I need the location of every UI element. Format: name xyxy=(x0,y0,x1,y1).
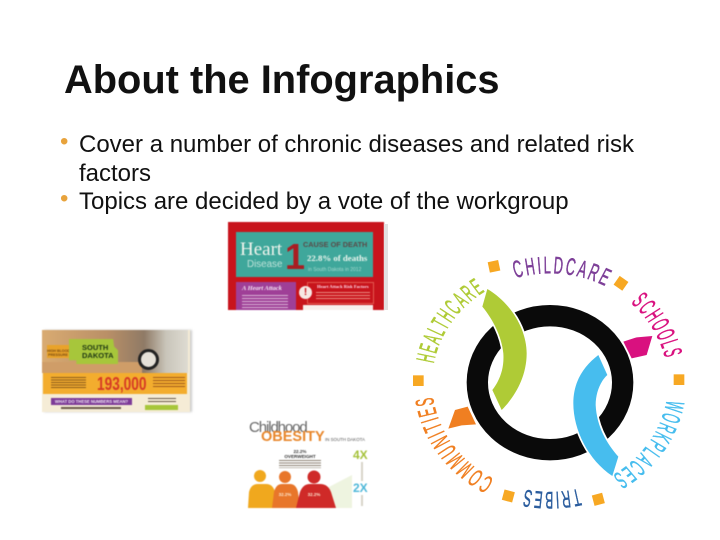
blue arc xyxy=(573,355,618,476)
black ring xyxy=(477,316,623,450)
bullet 1 text: Cover a number of chronic diseases and related risk xyxy=(79,131,634,158)
2X label: 2X xyxy=(353,481,368,495)
side text lines xyxy=(148,398,176,404)
statistic lines xyxy=(279,460,321,468)
heart thumbnail shadow xyxy=(384,224,388,310)
orange label: PRESSURE xyxy=(48,353,68,357)
tribes: TRIBES xyxy=(523,489,582,509)
healthcare: HEALTHCARE xyxy=(416,278,485,363)
schools: SCHOOLS xyxy=(632,292,682,357)
percent of deaths: 22.8% of deaths xyxy=(307,253,367,263)
figure labels: 32.2% xyxy=(279,492,291,497)
cause of death: CAUSE OF DEATH xyxy=(303,240,367,249)
193,000: 193,000 xyxy=(97,374,146,394)
logo: circular settings emblem xyxy=(413,256,685,509)
south dakota label xyxy=(82,343,114,360)
south dakota label: DAKOTA xyxy=(82,350,114,360)
blood pressure gauge xyxy=(138,349,159,370)
purple panel text lines xyxy=(242,295,288,309)
orange arrowhead xyxy=(448,407,476,429)
bullet 2 text: Topics are decided by a vote of the workgroup xyxy=(79,188,569,215)
warning badge: ! xyxy=(304,287,307,298)
ring labels xyxy=(415,256,685,509)
purple bar: WHAT DO THESE NUMBERS MEAN? xyxy=(55,399,128,404)
heading: Heart: Heart xyxy=(240,239,282,260)
orange label: HIGH BLOOD xyxy=(47,349,70,353)
thumbnail: South Dakota infographic xyxy=(42,330,190,412)
orange figure xyxy=(272,471,300,508)
in south dakota: IN SOUTH DAKOTA xyxy=(325,437,365,442)
bullet list xyxy=(60,128,634,215)
heading: Disease: Disease xyxy=(247,259,282,270)
pink arrowhead xyxy=(623,336,652,358)
yellow figure xyxy=(248,470,277,508)
orange label xyxy=(47,345,69,358)
obesity heading: OBESITY xyxy=(261,429,325,445)
white box xyxy=(303,305,373,311)
purple panel xyxy=(236,282,296,310)
risk text lines xyxy=(316,292,370,300)
risk factors panel xyxy=(307,282,374,304)
bullet 1 marker: • xyxy=(60,128,68,155)
scale pole xyxy=(361,460,363,506)
green arc xyxy=(482,289,527,410)
caption under purple bar xyxy=(61,407,121,409)
small caption: in South Dakota in 2012 xyxy=(308,267,361,273)
photo background xyxy=(42,330,188,373)
title: About the Infographics xyxy=(64,58,500,102)
statistic text xyxy=(284,449,316,459)
band text right xyxy=(153,377,185,389)
4X label: 4X xyxy=(353,448,368,462)
green button xyxy=(145,405,178,410)
orange squares xyxy=(413,260,684,506)
big number 1: 1 xyxy=(285,236,305,277)
green card xyxy=(69,339,118,364)
childcare: CHILDCARE xyxy=(513,256,612,286)
warning badge xyxy=(299,286,312,299)
green wedge xyxy=(327,475,352,508)
bullet 2 marker: • xyxy=(60,185,68,212)
thumbnail: heart disease infographic xyxy=(228,222,384,310)
statistic text: OVERWEIGHT xyxy=(284,454,316,459)
thumbnail: childhood obesity infographic xyxy=(248,418,373,508)
people figures xyxy=(247,469,352,509)
bullet 1 text xyxy=(79,131,634,187)
band text left xyxy=(51,377,86,389)
photo table xyxy=(42,362,142,373)
south dakota label: SOUTH xyxy=(82,343,108,352)
bullet 1 text: factors xyxy=(79,160,151,187)
risk heading: Heart Attack Risk Factors xyxy=(317,284,369,289)
teal header panel xyxy=(236,232,373,277)
childhood heading: Childhood xyxy=(249,419,307,436)
workplaces: WORKPLACES xyxy=(614,402,685,488)
orange band xyxy=(43,373,187,394)
communities: COMMUNITIES xyxy=(415,398,492,492)
purple bar xyxy=(51,398,132,405)
figure labels xyxy=(279,492,320,497)
red figure xyxy=(296,470,336,508)
statistic text: 22.2% xyxy=(293,449,307,454)
figure labels: 32.2% xyxy=(308,492,320,497)
a heart attack heading: A Heart Attack xyxy=(242,285,282,292)
